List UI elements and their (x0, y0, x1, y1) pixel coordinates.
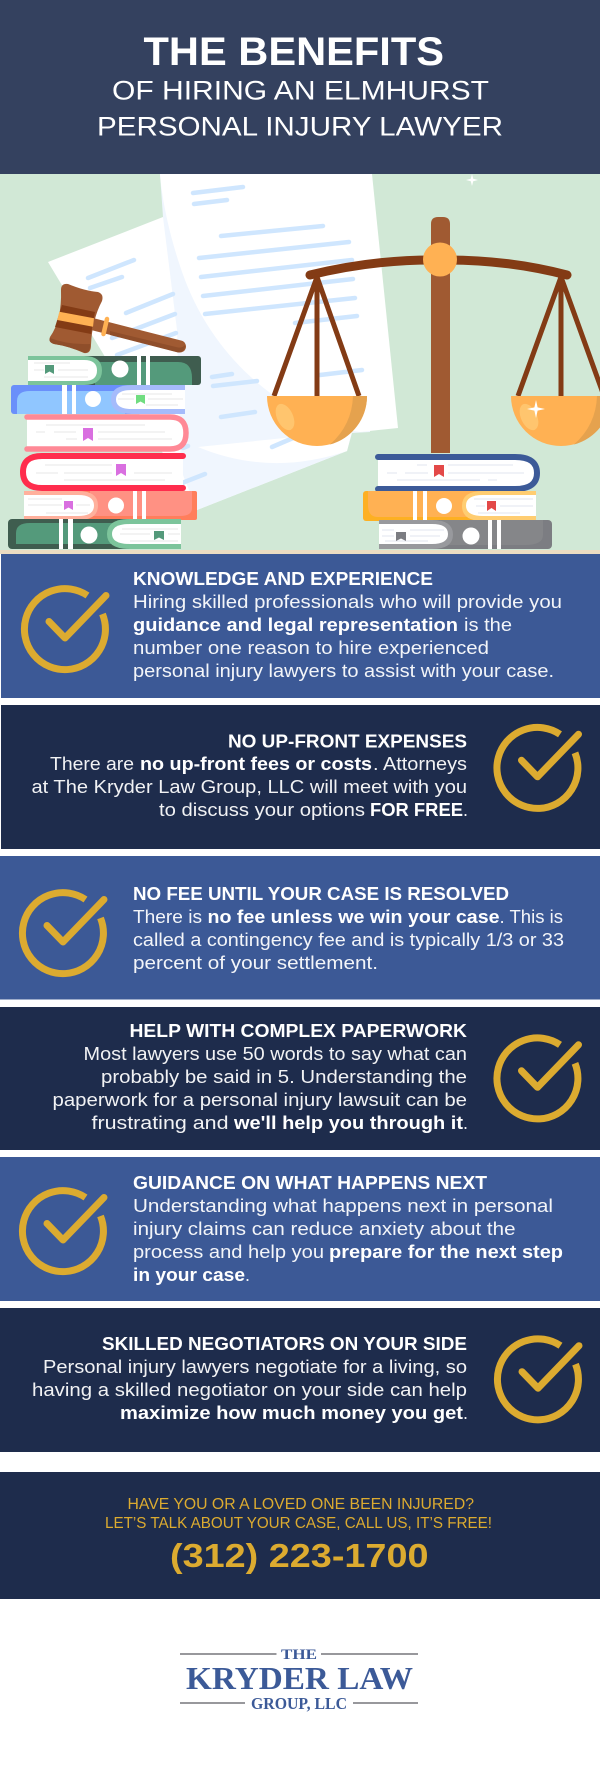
body text: injury claims can reduce anxiety about the (133, 1219, 516, 1239)
gavel handle (92, 319, 185, 352)
body text (133, 592, 562, 681)
body text: . Attorneys (373, 754, 467, 774)
panel: help with complex paperwork (0, 1007, 600, 1150)
blue book (11, 385, 185, 414)
body text (52, 1044, 468, 1133)
logo: group, llc: GROUP, LLC (251, 1694, 347, 1713)
body text: . (463, 800, 468, 820)
panel: guidance on what happens next (0, 1157, 600, 1301)
body text: at The Kryder Law Group, LLC will meet with you (32, 777, 467, 797)
body text: Personal injury lawyers negotiate for a living, so (43, 1357, 467, 1377)
body text: is the (464, 615, 512, 635)
body text: we'll help you through it (233, 1113, 463, 1133)
heading: SKILLED NEGOTIATORS ON YOUR SIDE (102, 1334, 467, 1354)
gray book (379, 520, 552, 549)
body text: probably be said in 5. Understanding the (101, 1067, 467, 1087)
scale post (431, 217, 450, 453)
red book (23, 456, 183, 488)
heading: NO FEE UNTIL YOUR CASE IS RESOLVED (133, 884, 509, 904)
title: the benefits: THE BENEFITS (144, 30, 444, 74)
phone number: (312) 223-1700 (170, 1537, 428, 1574)
scale pivot (423, 242, 457, 276)
body text: . (463, 1113, 468, 1133)
sparkle star (466, 174, 478, 186)
panel: no up-front expenses (1, 705, 600, 849)
body text: called a contingency fee and is typically 1/3 or 33 (133, 930, 564, 950)
body text: guidance and legal representation (133, 615, 458, 635)
subtitle line two: PERSONAL INJURY LAWYER (97, 112, 503, 142)
body text: in your case (133, 1265, 245, 1285)
body text: number one reason to hire experienced (133, 638, 489, 658)
call to action line one: HAVE YOU OR A LOVED ONE BEEN INJURED? (128, 1496, 474, 1513)
left pan (267, 396, 367, 446)
panel: skilled negotiators on your side (0, 1308, 600, 1452)
body text (133, 907, 564, 973)
body text (32, 754, 468, 820)
body text (133, 1196, 563, 1285)
body text: maximize how much money you get (120, 1403, 463, 1423)
back paper sheet (48, 174, 370, 510)
dark green book (8, 519, 181, 549)
green book (28, 356, 201, 385)
heading: GUIDANCE ON WHAT HAPPENS NEXT (133, 1173, 487, 1193)
body text: having a skilled negotiator on your side can help (32, 1380, 467, 1400)
scale beam (310, 260, 567, 275)
body text: Most lawyers use 50 words to say what can (84, 1044, 467, 1064)
heading: HELP WITH COMPLEX PAPERWORK (130, 1021, 467, 1041)
body text: Understanding what happens next in personal (133, 1196, 553, 1216)
icon: check circle (497, 727, 578, 808)
call to action panel (0, 1472, 600, 1599)
body text: There are (50, 754, 134, 774)
right book stack (363, 457, 552, 549)
body text: . (245, 1265, 250, 1285)
body text: to discuss your options (159, 800, 365, 820)
body text: process and help you (133, 1242, 324, 1262)
heading: NO UP-FRONT EXPENSES (228, 732, 467, 752)
body text: no fee unless we win your case (208, 907, 500, 927)
logo: the: THE (281, 1647, 317, 1663)
salmon book (24, 491, 197, 520)
pan strings (274, 277, 600, 396)
scales of justice (267, 217, 600, 453)
icon: check circle (497, 1038, 578, 1119)
hero illustration: gavel, books, papers and scales (0, 174, 600, 554)
heading: KNOWLEDGE AND EXPERIENCE (133, 569, 433, 589)
icon: check circle (22, 893, 104, 974)
body text: Hiring skilled professionals who will provide you (133, 592, 562, 612)
body text: no up-front fees or costs (140, 754, 372, 774)
body text: frustrating and (92, 1113, 228, 1133)
subtitle line one: OF HIRING AN ELMHURST (112, 76, 489, 106)
body text: There is (133, 907, 202, 927)
body text (32, 1357, 468, 1423)
call to action line two: LET’S TALK ABOUT YOUR CASE, CALL US, IT’S FREE! (105, 1515, 492, 1532)
body text: . This is (500, 907, 563, 927)
body text: personal injury lawyers to assist with your case. (133, 661, 554, 681)
right pan (511, 396, 600, 446)
law firm logo (180, 1647, 418, 1713)
body text: . (463, 1403, 468, 1423)
body text: paperwork for a personal injury lawsuit can be (52, 1090, 467, 1110)
pink book (27, 417, 186, 449)
panel: no fee until your case is resolved (0, 856, 600, 1000)
body text: FOR FREE (370, 800, 463, 820)
body text: percent of your settlement. (133, 953, 378, 973)
paper text lines (88, 187, 362, 483)
icon: check circle (497, 1339, 579, 1420)
body text: prepare for the next step (329, 1242, 563, 1262)
orange book (363, 491, 536, 521)
title banner (0, 0, 600, 174)
front paper sheet (160, 174, 398, 463)
gavel (50, 284, 185, 353)
navy book (378, 457, 537, 489)
icon: check circle (24, 589, 106, 670)
panel: knowledge and experience (1, 554, 600, 698)
logo: kryder law: KRYDER LAW (186, 1660, 413, 1696)
gavel head (50, 284, 102, 353)
icon: check circle (22, 1191, 104, 1272)
left book stack (8, 356, 201, 549)
